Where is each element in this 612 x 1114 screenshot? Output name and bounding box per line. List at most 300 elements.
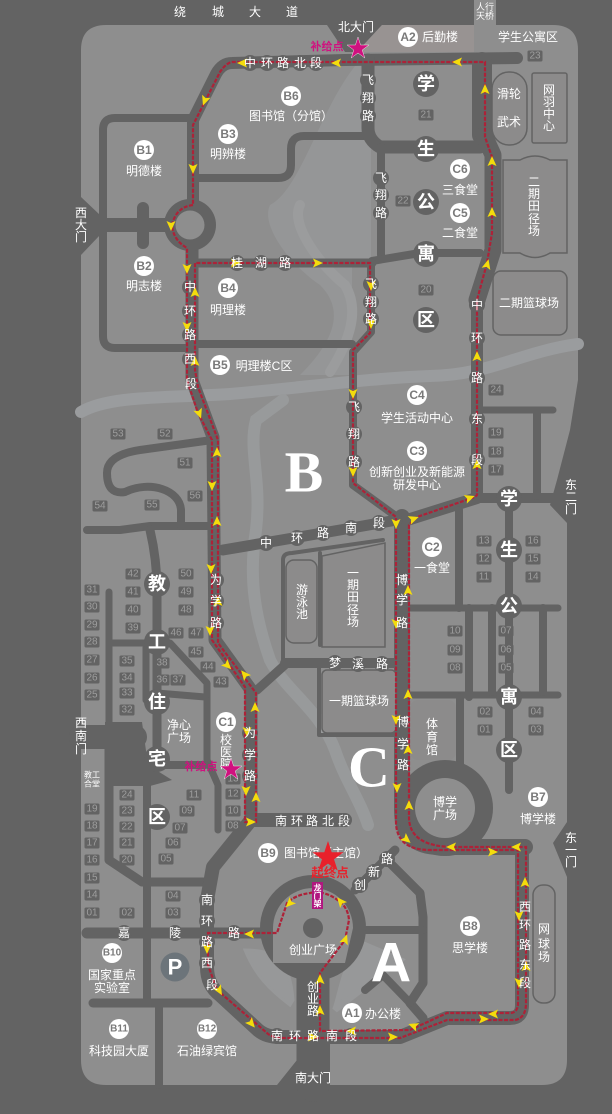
- chuangxin road: [354, 851, 393, 892]
- guihu road: 湖: [255, 255, 267, 270]
- faculty residence: 宅: [148, 748, 166, 769]
- west ring east: 段: [519, 975, 531, 990]
- building number tags: 42: [127, 568, 139, 580]
- west ring east: 西: [519, 900, 531, 914]
- building number tags: 20: [420, 284, 432, 296]
- building number tags: 22: [397, 196, 409, 206]
- ring road north: 中: [244, 55, 256, 70]
- building number tags: 17: [490, 464, 502, 476]
- building number tags: 03: [167, 908, 179, 918]
- south ring south: 南: [326, 1028, 338, 1043]
- chuangye road: 路: [307, 1003, 319, 1018]
- parking circle: [160, 952, 190, 982]
- swimming pool: 池: [296, 607, 308, 621]
- swimming pool: [286, 560, 317, 643]
- building number tags: 38: [156, 658, 168, 668]
- south ring north: 北: [322, 814, 334, 828]
- weixue road: 为: [210, 573, 222, 587]
- building number tags: 26: [86, 672, 98, 684]
- ring road east: 东: [471, 412, 483, 426]
- building markers: C3: [409, 444, 425, 458]
- zone letters: B: [285, 440, 323, 504]
- building number tags: 33: [121, 688, 133, 698]
- chuangxin road: 路: [381, 851, 393, 866]
- south ring west: [201, 892, 218, 992]
- weixue road: 学: [210, 593, 222, 608]
- tennis badminton centre: 中: [543, 106, 555, 121]
- building markers: B4: [220, 281, 236, 295]
- building number tags: 15: [86, 872, 98, 884]
- north student dorm: 学: [417, 73, 435, 94]
- phase one field: 场: [347, 615, 359, 629]
- building number tags: 43: [215, 676, 227, 688]
- east student dorm: 公: [500, 596, 518, 616]
- guihu road: [231, 255, 291, 270]
- building number tags: 05: [500, 662, 512, 674]
- gate labels: 一: [565, 843, 577, 857]
- building number tags: 28: [86, 636, 98, 648]
- boxue road: 学: [397, 736, 409, 751]
- north student dorm: 寓: [417, 243, 435, 264]
- gate labels: 门: [75, 229, 87, 244]
- ring road south section: 中: [260, 535, 272, 550]
- building number tags: 16: [86, 854, 98, 866]
- building number tags: 02: [121, 908, 133, 918]
- feixiang road: 路: [362, 108, 374, 123]
- feixiang road: 飞: [362, 73, 374, 87]
- building number tags: 12: [478, 554, 490, 564]
- building number tags: 44: [202, 662, 214, 672]
- building number tags: 45: [190, 646, 202, 658]
- building markers: C1: [218, 715, 234, 729]
- west ring east: 路: [519, 937, 531, 952]
- outer boulevard: 绕: [174, 5, 186, 19]
- ring road east: 路: [471, 370, 483, 385]
- chuangye road: 业: [307, 992, 319, 1006]
- building markers: B3: [220, 127, 236, 141]
- ring road north: 北: [294, 56, 306, 70]
- building number tags: 36: [156, 674, 168, 686]
- building number tags: 32: [121, 704, 133, 716]
- east student dorm: [496, 486, 522, 763]
- building markers: B10: [103, 948, 122, 958]
- outer boulevard: [174, 5, 298, 19]
- building markers: B6: [283, 89, 299, 103]
- building names: 明理楼: [210, 302, 246, 317]
- gate labels: 南: [75, 728, 87, 743]
- boxue road: 路: [396, 615, 408, 630]
- building names: 科技园大厦: [89, 1044, 149, 1058]
- parking circle: P: [168, 954, 182, 980]
- guihu road: 路: [279, 255, 291, 270]
- building number tags: 23: [121, 806, 133, 816]
- building number tags: 40: [127, 604, 139, 616]
- boxue plaza label: 广场: [433, 808, 457, 822]
- supply point north: 补给点: [310, 39, 344, 53]
- ring road north: [244, 55, 322, 70]
- building number tags: 56: [189, 490, 201, 502]
- building number tags: 21: [420, 110, 432, 120]
- mengxi road: 路: [376, 656, 388, 671]
- boxue road: 博: [397, 714, 409, 729]
- west ring east: 东: [519, 958, 531, 972]
- feixiang road: 路: [365, 311, 377, 326]
- dragon gate banner: 门: [314, 890, 322, 900]
- building number tags: [86, 50, 542, 918]
- skating and wushu: [492, 72, 527, 145]
- building number tags: 21: [121, 838, 133, 848]
- east student dorm: 生: [500, 540, 518, 560]
- pedestrian bridge label: 人行: [476, 1, 494, 12]
- gate labels: 东: [565, 478, 577, 492]
- south ring north: 南: [275, 813, 287, 828]
- phase one field: [322, 543, 385, 647]
- phase two field: 田: [528, 199, 540, 213]
- swimming pool: 泳: [296, 595, 308, 609]
- feixiang road: 翔: [365, 295, 377, 309]
- building number tags: 24: [121, 790, 133, 800]
- phase two field: 径: [528, 212, 540, 226]
- rotary west: [164, 199, 216, 251]
- feixiang road: 翔: [348, 427, 360, 441]
- building names: 学生公寓区: [498, 29, 558, 44]
- building number tags: 09: [181, 806, 193, 816]
- building names: 三食堂: [442, 182, 478, 197]
- ring road north: 环: [261, 56, 273, 70]
- building number tags: 04: [530, 706, 542, 718]
- building number tags: 37: [172, 674, 184, 686]
- phase one field: 田: [347, 590, 359, 604]
- east student dorm: 学: [500, 488, 518, 509]
- building number tags: 51: [179, 458, 191, 468]
- building number tags: 07: [174, 822, 186, 834]
- south ring south: 南: [271, 1028, 283, 1043]
- building number tags: 06: [167, 838, 179, 848]
- south ring north: 路: [306, 813, 318, 828]
- gate labels: 北大门: [338, 19, 374, 34]
- building number tags: 52: [159, 428, 171, 440]
- ring road south section: 南: [345, 520, 357, 535]
- building markers: B1: [136, 143, 152, 157]
- road network: [81, 58, 567, 1085]
- ring road west: 环: [184, 304, 196, 318]
- skating and wushu: 滑轮: [497, 87, 521, 101]
- feixiang road: 翔: [375, 188, 387, 202]
- ring road west: 西: [184, 352, 196, 366]
- south ring north: [275, 813, 350, 828]
- building markers: A2: [400, 30, 416, 44]
- pedestrian bridge label: [476, 1, 494, 21]
- building number tags: 18: [86, 820, 98, 832]
- tennis court: [533, 885, 555, 1003]
- north student dorm: 生: [417, 139, 435, 159]
- building number tags: 31: [86, 584, 98, 596]
- building number tags: 20: [121, 854, 133, 866]
- building names: 医: [220, 745, 232, 759]
- south ring west: 路: [201, 934, 213, 949]
- building number tags: 10: [227, 806, 239, 816]
- south ring south: 段: [345, 1028, 357, 1043]
- building number tags: 12: [227, 788, 239, 800]
- building names: 图书馆（分馆）: [249, 108, 333, 123]
- phase two field: 场: [528, 224, 540, 238]
- building number tags: 24: [490, 384, 502, 396]
- south ring south: [271, 1028, 357, 1043]
- building names: 研发中心: [393, 477, 441, 492]
- gate labels: 西: [75, 206, 87, 220]
- phase two field: [503, 156, 567, 258]
- tennis badminton centre: 心: [543, 119, 555, 133]
- ring road west: 中: [184, 279, 196, 294]
- building number tags: 55: [146, 500, 158, 510]
- building number tags: 17: [86, 838, 98, 848]
- ring road west: [184, 279, 197, 391]
- south ring south: 环: [289, 1029, 301, 1043]
- start finish point: 起终点: [311, 865, 349, 880]
- gate labels: 门: [565, 501, 577, 516]
- building names: 创新创业及新能源: [369, 464, 465, 479]
- tennis court: 网: [538, 922, 550, 936]
- ring road south section: 环: [291, 531, 303, 545]
- building names: 明辨楼: [210, 146, 246, 161]
- gate labels: 门: [75, 741, 87, 756]
- mengxi road: [329, 656, 388, 671]
- zone letters: A: [371, 930, 411, 994]
- dragon gate banner: [312, 882, 323, 909]
- building names: 一食堂: [414, 560, 450, 575]
- swimming pool: 游: [296, 583, 308, 597]
- route direction arrows: [166, 58, 530, 1042]
- building markers: C2: [424, 540, 440, 554]
- faculty residence: 区: [148, 807, 166, 827]
- gate labels: 东: [565, 831, 577, 845]
- building names: [84, 29, 558, 1058]
- phase one basketball: 一期篮球场: [329, 693, 389, 708]
- south ring west: 南: [201, 892, 213, 907]
- building number tags: 19: [490, 428, 502, 438]
- east student dorm: 寓: [500, 686, 518, 707]
- phase two basketball: 二期篮球场: [499, 295, 559, 310]
- ring road south section: 段: [373, 515, 385, 530]
- gate labels: [75, 19, 577, 1085]
- chuangye plaza label: 创业广场: [289, 943, 337, 957]
- jingxin plaza label: 广场: [167, 731, 191, 745]
- north student dorm: [413, 71, 439, 333]
- building markers: A1: [344, 1006, 360, 1020]
- ring road east: [471, 297, 483, 467]
- building number tags: 19: [86, 804, 98, 814]
- phase one basketball: [322, 670, 396, 733]
- building number tags: 14: [86, 890, 98, 900]
- building number tags: 48: [180, 604, 192, 616]
- ring road west: 段: [185, 376, 197, 391]
- building number tags: 05: [160, 854, 172, 864]
- building number tags: 13: [227, 774, 239, 784]
- chuangye plaza: [260, 875, 366, 981]
- phase two field: 二: [528, 175, 540, 189]
- phase one field: 期: [347, 578, 359, 592]
- building names: 合堂: [84, 778, 100, 788]
- building number tags: 25: [86, 690, 98, 700]
- building markers: B2: [136, 259, 152, 273]
- tennis badminton centre: 网: [543, 83, 555, 97]
- outer boulevard: 城: [212, 5, 224, 19]
- gate labels: 门: [565, 854, 577, 869]
- chuangye road: 创: [307, 980, 319, 994]
- weixue road: 为: [244, 726, 256, 740]
- building markers: B12: [198, 1024, 217, 1034]
- building number tags: 13: [478, 536, 490, 546]
- building markers: C4: [409, 388, 425, 402]
- gate labels: 大: [75, 218, 87, 232]
- boxue road: 博: [396, 572, 408, 587]
- boxue road: 学: [396, 592, 408, 607]
- building number tags: 35: [121, 656, 133, 666]
- building number tags: 15: [527, 554, 539, 564]
- building number tags: 47: [190, 628, 202, 638]
- gymnasium: 体: [426, 717, 438, 731]
- building markers: B9: [260, 846, 276, 860]
- south ring north: 环: [291, 814, 303, 828]
- chuangxin road: 创: [354, 878, 366, 892]
- mengxi road: 溪: [352, 657, 364, 671]
- supply point north: [310, 37, 369, 58]
- building markers: B11: [110, 1024, 128, 1034]
- skating and wushu: 武术: [497, 115, 521, 129]
- building number tags: 08: [227, 820, 239, 832]
- west gate notch: [81, 197, 100, 255]
- faculty residence: 教: [148, 574, 166, 594]
- faculty residence: 工: [148, 632, 166, 652]
- building number tags: 30: [86, 602, 98, 612]
- building number tags: 27: [86, 654, 98, 666]
- building markers: B8: [462, 919, 478, 933]
- jingxin plaza label: 净心: [167, 718, 191, 732]
- building number tags: 50: [180, 568, 192, 580]
- building markers: C6: [452, 162, 468, 176]
- supply point west: [184, 758, 242, 779]
- building names: 博学楼: [520, 811, 556, 826]
- building names: 校: [220, 732, 232, 747]
- building markers: C5: [452, 206, 468, 220]
- jingxin plaza label: [167, 718, 191, 745]
- dragon gate banner: 架: [314, 898, 322, 908]
- ring road north: 段: [310, 55, 322, 70]
- ring road east: 段: [471, 452, 483, 467]
- pedestrian bridge label: 天桥: [476, 10, 494, 21]
- phase two field: 期: [528, 187, 540, 201]
- guihu road: 桂: [231, 255, 243, 270]
- outer boulevard: 道: [286, 5, 298, 19]
- building markers: B5: [212, 358, 228, 372]
- building number tags: 39: [127, 622, 139, 634]
- building number tags: 34: [121, 672, 133, 684]
- south ring west: 环: [201, 914, 213, 928]
- gate labels: 西: [75, 716, 87, 730]
- tennis court: 场: [538, 950, 550, 964]
- road name labels: [118, 1, 531, 1043]
- tennis court: 球: [538, 937, 550, 951]
- feixiang road: 飞: [365, 277, 377, 291]
- building number tags: 08: [449, 662, 461, 674]
- faculty residence: 住: [148, 692, 166, 712]
- sports buildings: [167, 72, 567, 1003]
- chuangye road: [307, 980, 319, 1018]
- building names: 图书馆（主馆）: [284, 845, 368, 860]
- building number tags: 11: [479, 572, 490, 582]
- gate labels: 南大门: [295, 1070, 331, 1085]
- north student dorm: 区: [417, 310, 435, 330]
- ring road south section: [260, 515, 385, 550]
- weixue road: 路: [210, 615, 222, 630]
- building number tags: 54: [94, 500, 106, 512]
- ring road west: 路: [184, 327, 196, 342]
- feixiang road: 路: [375, 205, 387, 220]
- gate labels: 二: [565, 490, 577, 504]
- north student dorm: 公: [417, 192, 435, 212]
- building names: 后勤楼: [422, 29, 458, 44]
- feixiang road: [348, 73, 387, 469]
- boxue plaza label: [433, 794, 457, 822]
- ring road south section: 路: [317, 525, 329, 540]
- building number tags: 46: [170, 628, 182, 638]
- building names: 学生活动中心: [381, 410, 453, 425]
- river: [81, 64, 578, 1010]
- building number tags: 01: [86, 908, 98, 918]
- building number tags: 01: [479, 724, 491, 736]
- west ring east: [519, 900, 531, 990]
- south ring north: 段: [338, 813, 350, 828]
- building names: 国家重点: [88, 967, 136, 982]
- building number tags: 29: [86, 620, 98, 630]
- feixiang road: 飞: [375, 171, 387, 185]
- outer boulevard: 大: [249, 5, 261, 19]
- building names: 石油绿宾馆: [177, 1043, 237, 1058]
- building number tags: 16: [527, 536, 539, 546]
- building number tags: 53: [112, 428, 124, 440]
- building names: 实验室: [94, 980, 130, 995]
- jialing road: 嘉: [118, 926, 130, 940]
- south ring south: 路: [307, 1028, 319, 1043]
- logistics block tint: [357, 25, 474, 52]
- building names: 明理楼C区: [236, 358, 292, 373]
- ring road north: 路: [277, 55, 289, 70]
- building number tags: 14: [527, 572, 539, 582]
- building number tags: 09: [449, 644, 461, 656]
- jialing road: 路: [228, 925, 240, 940]
- building number tags: 23: [529, 50, 541, 62]
- zone letters: C: [348, 734, 390, 800]
- weixue road: 学: [244, 747, 256, 762]
- boxue road: [396, 572, 409, 772]
- road name chips: [116, 55, 485, 1044]
- chuangxin road: 新: [368, 864, 380, 879]
- supply point west: 补给点: [184, 759, 218, 773]
- phase two basketball: [493, 271, 567, 335]
- campus ground: [81, 25, 578, 1085]
- east student dorm: 区: [500, 740, 518, 760]
- building number tags: 07: [500, 626, 512, 636]
- dormitory big labels: [144, 71, 522, 830]
- building number tags: 10: [449, 626, 461, 636]
- building number tags: 04: [167, 890, 179, 902]
- building number tags: 22: [121, 822, 133, 832]
- feixiang road: 路: [348, 454, 360, 469]
- building names: 院: [220, 757, 232, 771]
- pedestrian bridge block: [474, 0, 496, 25]
- building number tags: 03: [530, 724, 542, 736]
- west ring east: 环: [519, 918, 531, 932]
